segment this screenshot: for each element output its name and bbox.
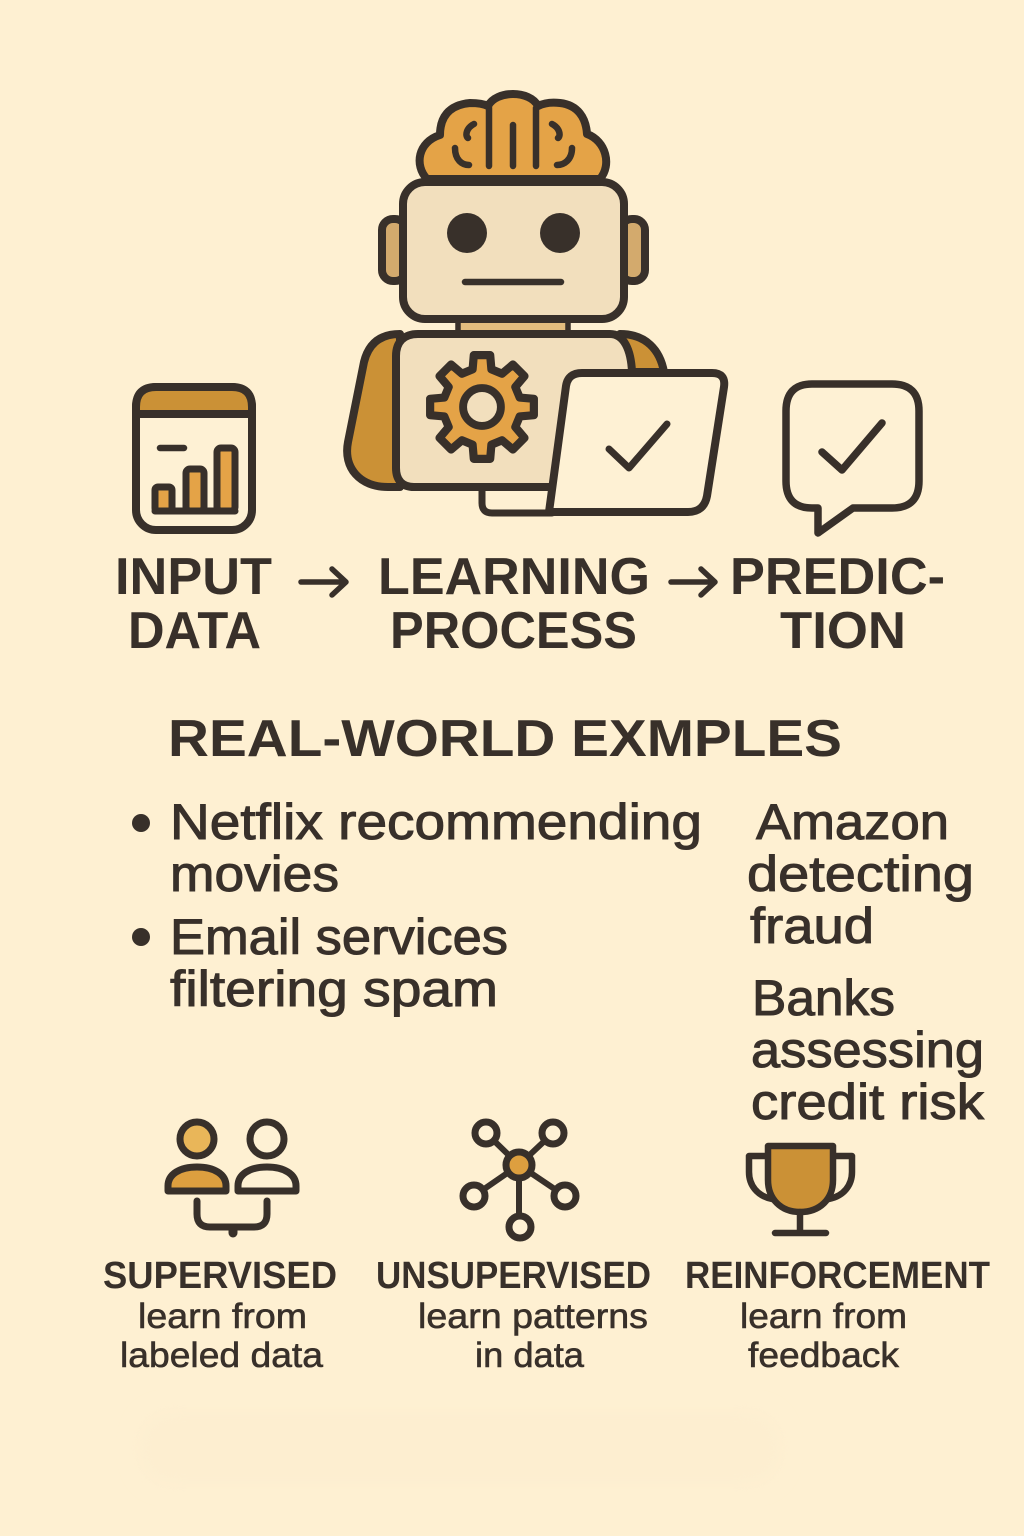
arrow: learning to prediction [671, 569, 715, 595]
example: banks: Banks [752, 970, 895, 1026]
icon: unsupervised network [463, 1122, 576, 1238]
robot neck [458, 320, 568, 336]
example: banks: assessing [751, 1022, 984, 1078]
example: banks: credit risk [751, 1074, 985, 1130]
heading: learning process: PROCESS [390, 602, 637, 660]
label: supervised: learn from [138, 1297, 307, 1336]
label: unsupervised: in data [475, 1336, 585, 1375]
examples list: right column [747, 794, 985, 1130]
robot torso [396, 334, 632, 487]
robot mouth [465, 279, 561, 285]
icon: reinforcement trophy [749, 1146, 852, 1233]
robot brain [420, 94, 606, 179]
label: unsupervised: learn patterns [418, 1297, 648, 1336]
example: netflix: Netflix recommending [170, 794, 702, 850]
example: amazon: detecting [747, 846, 974, 902]
label: reinforcement: REINFORCEMENT [685, 1255, 990, 1297]
robot eyes [447, 213, 580, 253]
icon: gear [430, 355, 534, 459]
icon: input data chart [136, 387, 252, 530]
label: supervised: labeled data [120, 1336, 324, 1375]
heading: real-world examples: REAL-WORLD EXMPLES [168, 710, 842, 768]
heading: prediction: TION [780, 602, 906, 660]
laptop base [482, 490, 552, 513]
bullet [132, 928, 150, 946]
examples list: left column [132, 794, 702, 1017]
label: reinforcement: feedback [748, 1336, 900, 1375]
arrow: input to learning [301, 569, 346, 595]
heading: prediction: PREDIC- [730, 548, 945, 606]
icon: supervised people [168, 1122, 296, 1233]
example: amazon: Amazon [756, 794, 949, 850]
robot head [403, 182, 624, 319]
heading: input data: INPUT [115, 548, 272, 606]
label: unsupervised: UNSUPERVISED [376, 1255, 651, 1297]
label: reinforcement: learn from [740, 1297, 907, 1336]
heading: input data: DATA [128, 602, 261, 660]
heading: learning process: LEARNING [378, 548, 650, 606]
example: email: Email services [170, 909, 508, 965]
label: supervised: SUPERVISED [103, 1255, 337, 1297]
laptop screen [549, 373, 724, 512]
example: netflix: movies [170, 846, 339, 902]
icon: prediction speech bubble [786, 384, 919, 533]
icon: robot learning process [347, 94, 724, 513]
bullet [132, 814, 150, 832]
laptop check mark [609, 424, 667, 468]
example: email: filtering spam [170, 961, 498, 1017]
example: amazon: fraud [750, 898, 874, 954]
robot ears [382, 219, 645, 281]
robot back shoulders [347, 334, 664, 487]
